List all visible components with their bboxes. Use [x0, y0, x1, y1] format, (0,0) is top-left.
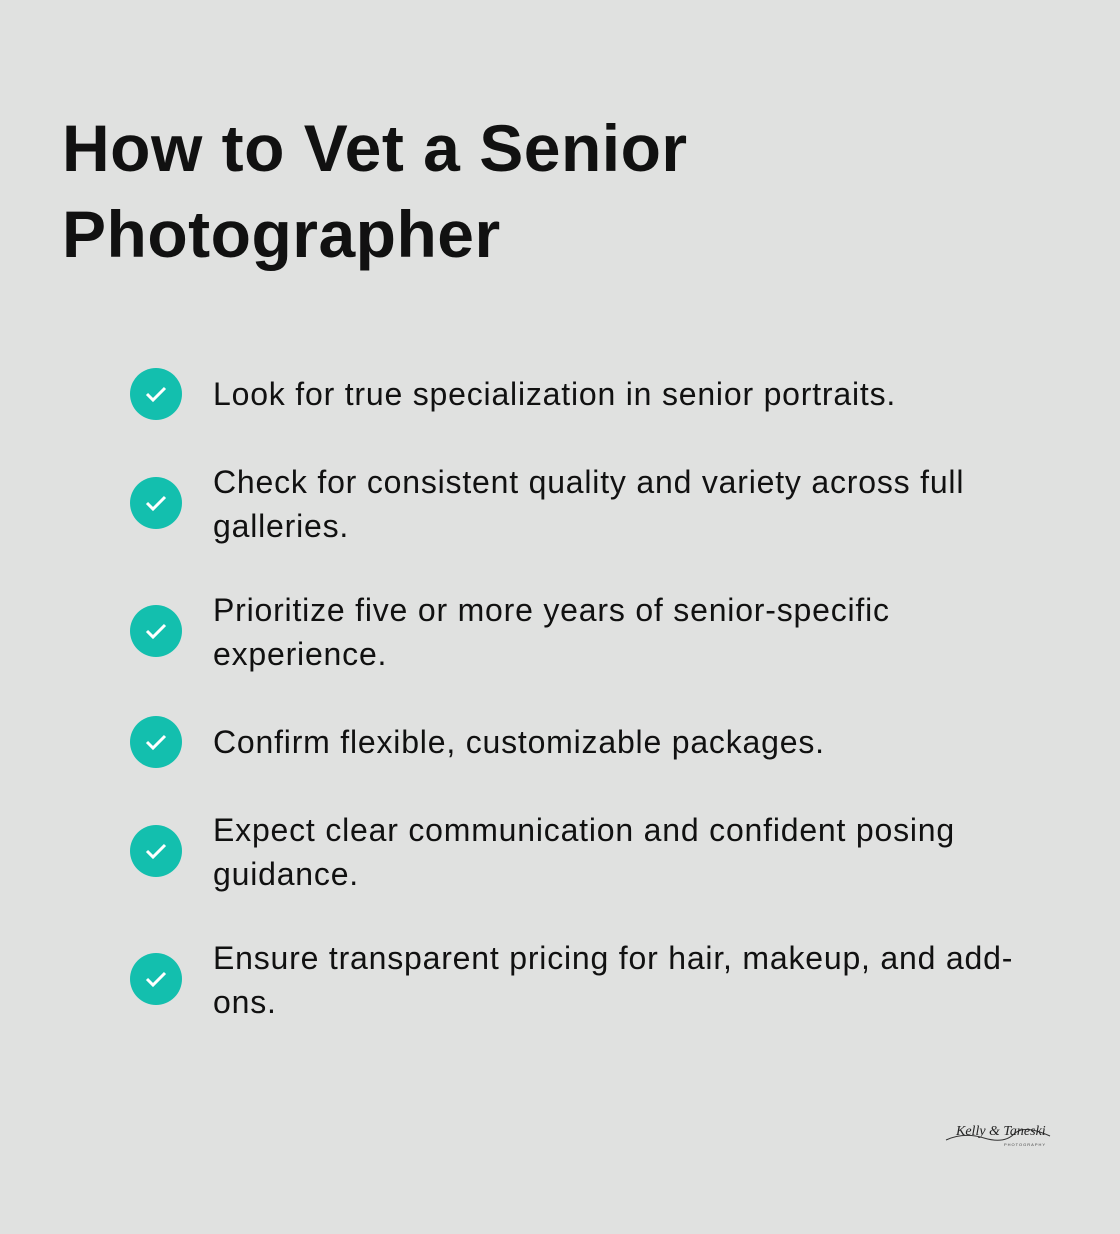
- text: ons.: [213, 984, 277, 1020]
- text: Prioritize five or more years of senior-specific: [213, 592, 890, 628]
- icon: check: [130, 477, 182, 529]
- text: galleries.: [213, 508, 349, 544]
- icon: check: [130, 605, 182, 657]
- item 2: [130, 464, 964, 544]
- logo: signature: PHOTOGRAPHY: [1004, 1142, 1046, 1147]
- icon: check: [130, 825, 182, 877]
- item 6: [130, 940, 1013, 1020]
- text: experience.: [213, 636, 387, 672]
- text: Expect clear communication and confident posing: [213, 812, 955, 848]
- text: [213, 592, 890, 672]
- title: [62, 111, 688, 271]
- icon: check: [130, 716, 182, 768]
- item 3: [130, 592, 890, 672]
- logo: signature: Kelly & Taneski: [956, 1124, 1046, 1139]
- text: [213, 812, 955, 892]
- text: Confirm flexible, customizable packages.: [213, 724, 825, 760]
- text: [213, 940, 1013, 1020]
- text: Look for true specialization in senior portraits.: [213, 376, 896, 412]
- logo: signature: [946, 1124, 1050, 1147]
- icon: check: [130, 953, 182, 1005]
- text: Ensure transparent pricing for hair, makeup, and add-: [213, 940, 1013, 976]
- text: [213, 464, 964, 544]
- item 4: [130, 716, 825, 768]
- text: guidance.: [213, 856, 359, 892]
- title: How to Vet a Senior: [62, 111, 688, 185]
- text: Check for consistent quality and variety across full: [213, 464, 964, 500]
- item 5: [130, 812, 955, 892]
- title: Photographer: [62, 197, 501, 271]
- icon: check: [130, 368, 182, 420]
- item 1: [130, 368, 896, 420]
